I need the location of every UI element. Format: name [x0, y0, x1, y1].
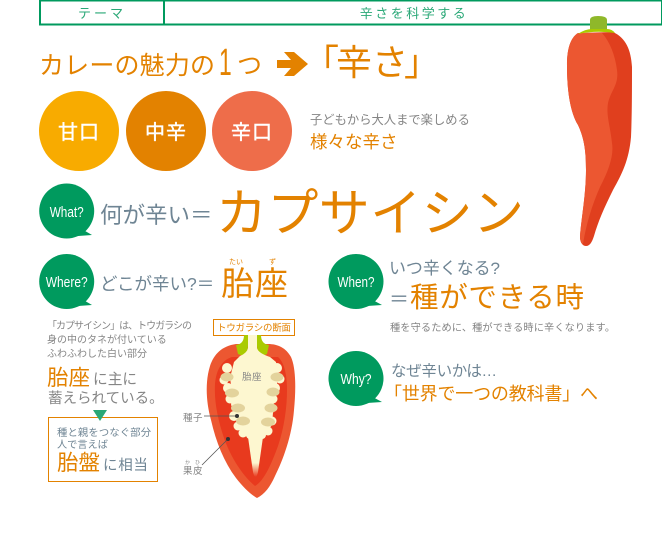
- badge: What?: What?: [50, 204, 84, 221]
- callout: human placenta analogy: 胎盤: [57, 451, 100, 475]
- badge: When?: [328, 254, 384, 309]
- text: various levels of spiciness: 子どもから大人まで楽しめる: [310, 113, 470, 127]
- badge: Why?: Why?: [340, 371, 372, 388]
- text: stored mainly in placenta: 蓄えられている。: [48, 390, 164, 407]
- text: capsaicin description: 「カプサイシン」は、トウガラシの: [47, 320, 192, 332]
- callout: human placenta analogy: 人で言えば: [57, 439, 108, 451]
- green stem: [236, 335, 269, 356]
- spice level: hot: [212, 91, 292, 171]
- title: one of curry's charms is spiciness: つ: [237, 52, 262, 80]
- heading: where is spicy = placenta: どこが辛い?＝: [100, 274, 214, 294]
- header bar: theme: [40, 0, 662, 25]
- title: one of curry's charms is spiciness: 1: [219, 41, 232, 83]
- title: one of curry's charms is spiciness: さ: [372, 42, 408, 83]
- text: capsaicin description: 身の中のタネが付いている: [47, 333, 167, 346]
- callout: human placenta analogy: [48, 418, 158, 482]
- badge: Why?: [328, 351, 384, 406]
- heading: when = when seeds form: [389, 259, 584, 314]
- badge: When?: When?: [338, 274, 374, 291]
- header bar: theme: 辛さを科学する: [360, 6, 468, 21]
- heading: where is spicy = placenta: ず: [269, 257, 276, 266]
- text: why spicy: [384, 362, 598, 404]
- text: capsaicin description: ふわふわした白い部分: [47, 347, 147, 360]
- spice level: hot: 辛口: [231, 121, 273, 144]
- text: capsaicin description: [47, 320, 192, 360]
- placenta: [220, 335, 284, 477]
- title: one of curry's charms is spiciness: カレーの魅力の: [39, 52, 215, 80]
- title: one of curry's charms is spiciness: [39, 41, 440, 83]
- icon: down triangle: [93, 410, 107, 421]
- spice level: medium: 中辛: [145, 121, 187, 144]
- icon: arrow: [277, 52, 308, 76]
- seeds: [220, 372, 284, 426]
- inner flesh: [215, 357, 287, 486]
- heading: when = when seeds form: 種ができる時: [410, 282, 584, 314]
- label: seed: 種子: [183, 413, 203, 424]
- spice level: mild: 甘口: [58, 121, 100, 144]
- text: stored mainly in placenta: [47, 366, 164, 407]
- label: pericarp: か: [185, 459, 190, 466]
- spice level: medium: [126, 91, 206, 171]
- heading: what is spicy = capsaicin: 何が辛い＝: [100, 203, 213, 228]
- text: spiciness protects seeds: 種を守るために、種ができる時に辛くなります。: [390, 321, 615, 334]
- text: various levels of spiciness: 様々な辛さ: [310, 132, 398, 152]
- title: one of curry's charms is spiciness: 辛: [336, 42, 372, 83]
- text: why spicy: なぜ辛いかは…: [391, 362, 497, 380]
- heading: where is spicy = placenta: [100, 257, 289, 302]
- header bar: theme: テーマ: [78, 6, 126, 21]
- heading: where is spicy = placenta: たい: [229, 258, 243, 266]
- heading: when = when seeds form: ＝: [389, 289, 409, 311]
- label: cross-section title: [214, 320, 294, 336]
- text: why spicy: 「世界で一つの教科書」へ: [384, 384, 598, 404]
- label: pericarp: ひ: [195, 460, 200, 466]
- outer flesh: [207, 344, 295, 498]
- text: various levels of spiciness: [310, 113, 470, 152]
- text: stored mainly in placenta: に主に: [93, 371, 137, 388]
- label: seed: [183, 413, 239, 424]
- label: placenta: 胎座: [242, 371, 262, 383]
- heading: what is spicy = capsaicin: カプサイシン: [216, 185, 524, 242]
- text: stored mainly in placenta: 胎座: [47, 366, 90, 390]
- callout: human placenta analogy: に相当: [103, 457, 149, 474]
- callout: human placenta analogy: 種と親をつなぐ部分: [57, 426, 152, 439]
- spice level: mild: [39, 91, 119, 171]
- heading: where is spicy = placenta: 胎座: [221, 265, 289, 302]
- title: one of curry's charms is spiciness: 」: [404, 42, 440, 83]
- title: one of curry's charms is spiciness: 「: [303, 42, 339, 83]
- badge: Where?: Where?: [46, 274, 88, 291]
- icon: red chili pepper: [567, 16, 632, 246]
- label: cross-section title: トウガラシの断面: [217, 322, 291, 334]
- badge: What?: [39, 184, 94, 238]
- diagram: chili cross-section: [183, 320, 295, 498]
- heading: when = when seeds form: いつ辛くなる?: [389, 259, 500, 278]
- label: pericarp: [183, 437, 230, 477]
- label: pericarp: 果皮: [183, 465, 203, 477]
- badge: Where?: [39, 254, 94, 309]
